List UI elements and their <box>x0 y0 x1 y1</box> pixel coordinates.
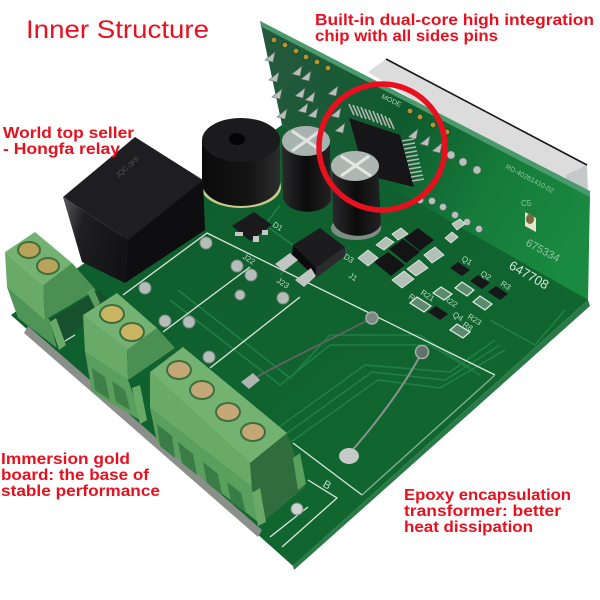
callout: chip: chip with all sides pins <box>315 28 498 45</box>
callout: transformer: heat dissipation <box>404 519 533 536</box>
terminal block: left two-pole <box>5 232 108 350</box>
silkscreen designators: R8 <box>461 320 475 333</box>
callout: chip <box>315 12 594 45</box>
silkscreen designators: R22 <box>442 294 460 310</box>
callout: immersion gold board: stable performance <box>1 483 160 500</box>
front capacitor <box>331 151 381 240</box>
resistors <box>410 282 492 338</box>
silkscreen designators: Q2 <box>479 269 493 283</box>
relay: JQC-3FF <box>115 156 141 180</box>
main chip with pins <box>349 94 424 187</box>
callout: immersion gold board <box>1 451 160 500</box>
callout: transformer: Epoxy encapsulation <box>404 487 571 504</box>
relay <box>63 137 205 283</box>
silkscreen designators: R23 <box>466 312 484 328</box>
C5 component <box>525 212 536 232</box>
printed part numbers <box>504 164 562 265</box>
terminal block: middle two-pole <box>83 293 175 424</box>
silkscreen designators: R24 <box>407 292 425 308</box>
printed part numbers: 675334 <box>524 237 562 265</box>
title: Inner Structure <box>26 16 209 44</box>
silkscreen designators <box>241 220 552 492</box>
display module behind the board <box>368 59 588 195</box>
solder pads <box>358 219 465 288</box>
rear capacitor <box>282 126 331 212</box>
callout: transformer <box>404 487 571 536</box>
terminal block: front four-pole <box>150 347 306 526</box>
callout: relay: World top seller <box>3 125 134 142</box>
silkscreen designators: Q4 <box>451 310 465 324</box>
white silkscreen outlines <box>58 233 495 547</box>
D-Pak power device <box>275 228 345 287</box>
silver solder pins <box>265 52 482 232</box>
lower edge strip <box>24 326 262 537</box>
silver vias <box>139 237 303 515</box>
callout: chip: Built-in dual-core high integration <box>315 12 594 29</box>
D1 regulator <box>232 212 272 242</box>
silkscreen designators: 647708 <box>506 258 552 292</box>
silkscreen designators: J23 <box>275 276 291 291</box>
silkscreen designators: Q1 <box>460 254 474 268</box>
vertical back circuit board <box>260 21 590 302</box>
callout: relay <box>3 125 134 158</box>
callout: immersion gold board: Immersion gold <box>1 451 130 468</box>
printed part numbers: C5 <box>521 199 532 208</box>
gold contact pads <box>271 37 450 135</box>
callout: transformer: transformer: better <box>404 503 561 520</box>
callout: immersion gold board: board: the base of <box>1 467 150 484</box>
silkscreen designators: D3 <box>342 252 356 265</box>
triple diodes <box>374 228 434 276</box>
silkscreen designators: R3 <box>499 279 513 292</box>
silkscreen designators: R21 <box>419 288 437 304</box>
red highlight circle around chip <box>319 84 445 210</box>
transistors Q1 Q2 Q3 Q4 <box>428 262 508 320</box>
copper traces <box>170 205 565 442</box>
silkscreen designators: J1 <box>347 271 359 283</box>
silkscreen designators: B <box>320 478 333 492</box>
callout: relay: - Hongfa relay <box>3 141 120 158</box>
silkscreen designators: J22 <box>241 252 257 267</box>
printed part numbers: RD-40261410-02 <box>504 164 555 195</box>
main chip with pins: MODE <box>380 94 402 109</box>
transformer wires <box>241 312 428 464</box>
main circuit board <box>11 125 590 570</box>
buzzer <box>201 118 281 208</box>
small surface-mount parts <box>232 212 508 338</box>
silkscreen designators: D1 <box>271 220 285 233</box>
